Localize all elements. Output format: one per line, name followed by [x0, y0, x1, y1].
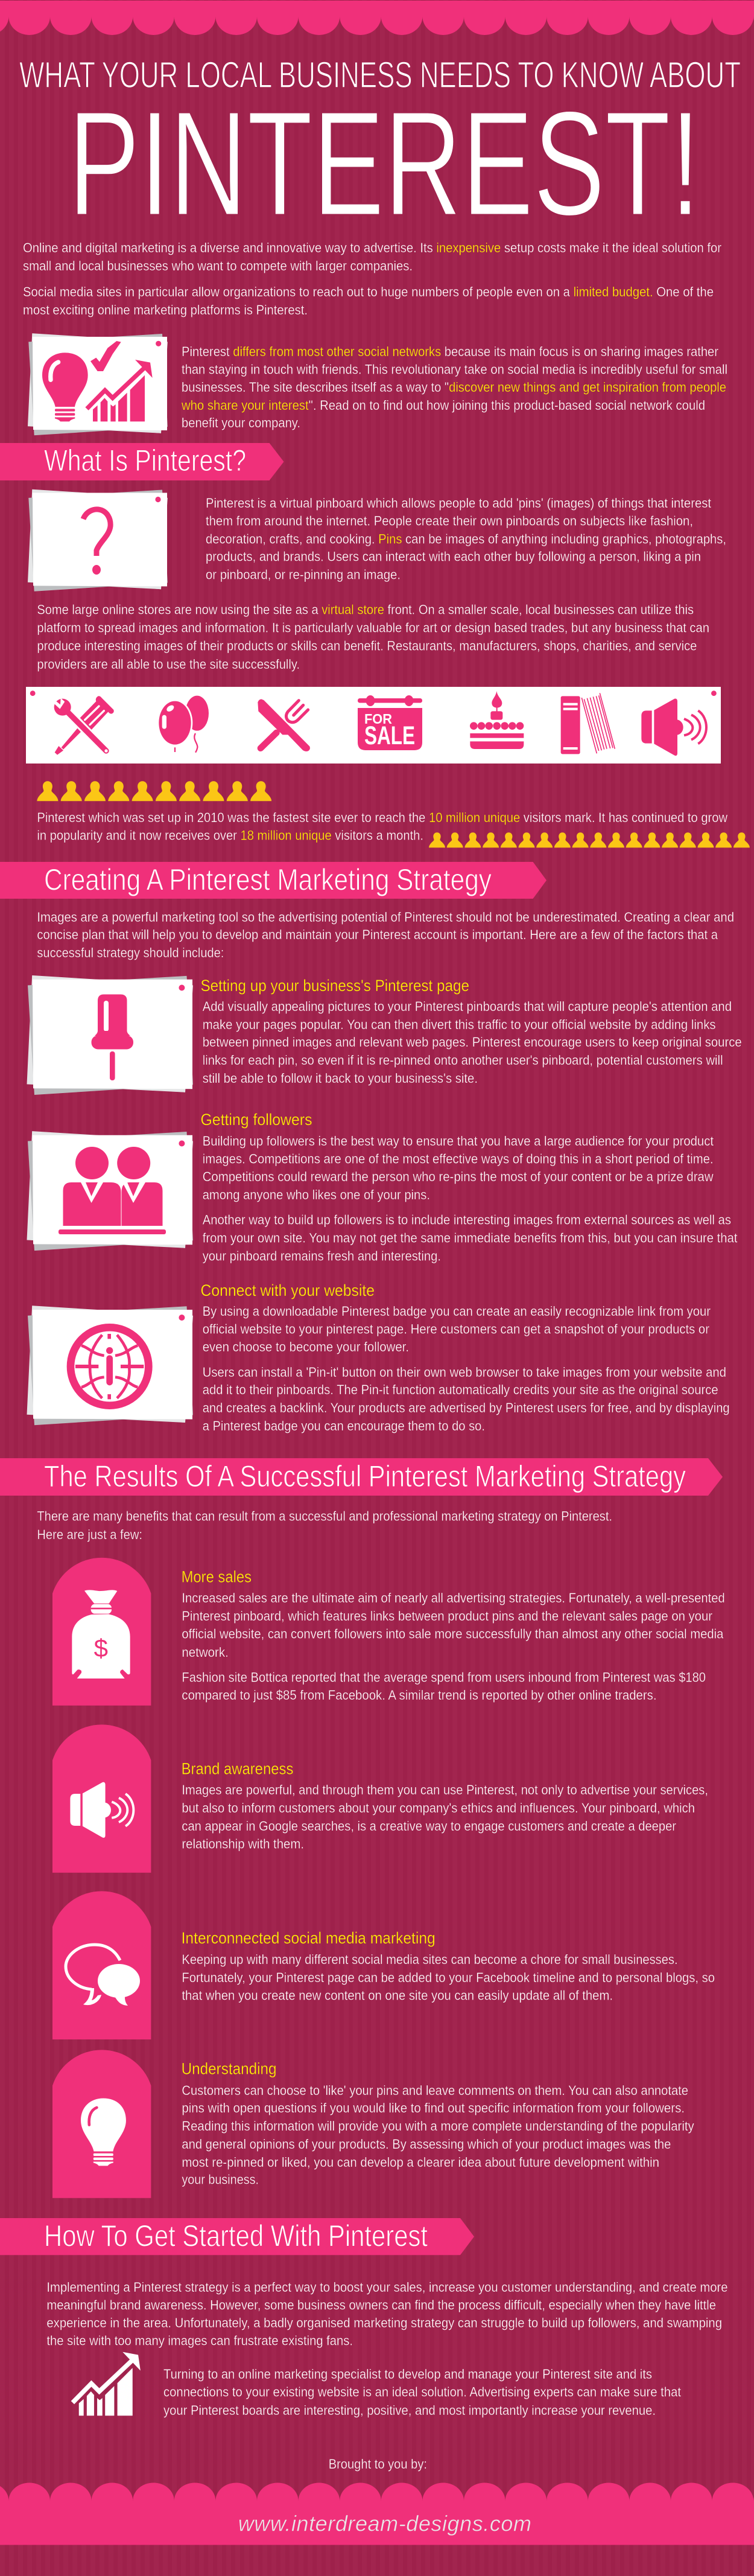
text: understanding: pins with open questions if you would like to find out specific information from your followers.: [182, 2100, 685, 2115]
panel: push pin note card: [27, 975, 193, 1095]
text: getting followers: [200, 1111, 737, 1263]
text: interconnected marketing: [182, 1929, 715, 2003]
text: how Pinterest differs: Pinterest differs from most other social networks because its main focus is on sharing images rather: [182, 344, 718, 359]
footer website address: www.interdream-designs.com: [238, 2511, 531, 2536]
text: connect with your website: official website to your pinterest page. Here customers can get a snapshot of your products or: [203, 1322, 709, 1337]
icon: books: [561, 693, 615, 754]
text: getting started: [46, 2280, 727, 2348]
panel: money bag arch: $: [94, 1634, 108, 1662]
text: interconnected marketing: that when you create new content on one site you can easily update all of them.: [182, 1988, 613, 2003]
panel: question mark note card: [28, 489, 168, 591]
intro text: small and local businesses who want to compete with larger companies.: [23, 258, 413, 273]
text: understanding: [182, 2059, 694, 2187]
text: interconnected marketing: Fortunately, your Pinterest page can be added to your Facebook timeline and to personal blogs, so: [182, 1970, 715, 1985]
text: connect with your website: even choose to become your follower.: [203, 1339, 409, 1354]
text: what is Pinterest: them from around the internet. People create their own pinboards on subjects like fashion,: [206, 513, 693, 529]
text: brought to you by: Brought to you by:: [329, 2456, 427, 2472]
text: how Pinterest differs: benefit your company.: [182, 415, 300, 430]
text: strategy intro: [37, 910, 734, 960]
intro text: Social media sites in particular allow organizations to reach out to huge numbers of people even on a limited budget. One of the: [23, 284, 714, 299]
panel: money bag arch: [52, 1558, 151, 1706]
icon: knife and fork: [258, 699, 310, 751]
text: interconnected marketing: Keeping up with many different social media sites can become a chore for small businesses.: [182, 1952, 678, 1967]
section banner: Creating A Pinterest Marketing Strategy: Creating A Pinterest Marketing Strategy: [44, 863, 492, 897]
text: results intro: Here are just a few:: [37, 1527, 142, 1542]
text: brand awareness: but also to inform customers about your company's ethics and influences. Your pinboard, which: [182, 1800, 695, 1816]
text: brand awareness: can appear in Google searches, is a creative way to engage customers and create a deeper: [182, 1819, 676, 1834]
text: virtual store front: providers are all able to use the site successfully.: [37, 657, 300, 672]
text: understanding: most re-pinned or liked, you can develop a clearer idea about future development within: [182, 2155, 659, 2170]
text: what is Pinterest: Pinterest is a virtual pinboard which allows people to add 'pins' (images) of things that interest: [206, 496, 711, 511]
panel: light bulb arch: [52, 2050, 151, 2198]
text: understanding: Understanding: [182, 2059, 276, 2077]
text: getting followers: images. Competitions are one of the most effective ways of doing this in a short period of time.: [203, 1152, 714, 1167]
text: getting started: the site with too many images can frustrate existing fans.: [46, 2333, 353, 2348]
text: marketing specialist: connections to your existing website is an ideal solution. Advertising experts can make sure that: [163, 2385, 681, 2400]
text: getting followers: among anyone who likes one of your pins.: [203, 1187, 430, 1202]
text: marketing specialist: your Pinterest boards are interesting, positive, and most importantly increase your revenue.: [163, 2403, 656, 2418]
text: visitor statistics: [37, 810, 727, 843]
icon: for sale sign: [358, 695, 422, 750]
text: setting up your page: Setting up your business's Pinterest page: [200, 977, 469, 995]
text: how Pinterest differs: [181, 344, 727, 430]
text: connect with your website: By using a downloadable Pinterest badge you can create an easily recognizable link from your: [203, 1304, 711, 1319]
text: brand awareness: Brand awareness: [182, 1760, 293, 1778]
text: results intro: There are many benefits that can result from a successful and professional marketing strategy on Pinterest.: [37, 1509, 612, 1523]
text: what is Pinterest: decoration, crafts, and cooking. Pins can be images of anything including graphics, photographs,: [206, 531, 726, 547]
icon: birthday cake: [470, 691, 524, 749]
icon: balloons: [159, 696, 209, 753]
text: interconnected marketing: Interconnected social media marketing: [182, 1929, 436, 1947]
text: brand awareness: [182, 1760, 708, 1852]
icon: growth chart: [72, 2352, 141, 2415]
text: visitor statistics: in popularity and it now receives over 18 million unique visitors a month.: [37, 828, 423, 843]
text: understanding: Reading this information will provide you with a more complete understanding of the popularity: [182, 2119, 694, 2134]
icon: speaker: [641, 698, 706, 756]
text: getting followers: Building up followers is the best way to ensure that you have a large audience for your product: [203, 1133, 714, 1149]
panel: speaker arch: [52, 1724, 151, 1873]
icon: for sale sign: FOR: [364, 711, 392, 727]
text: virtual store front: [37, 602, 709, 672]
top scalloped border: [0, 1, 754, 35]
text: more sales: Pinterest pinboard, which features links between product pins and the relevant sales page on your: [182, 1608, 712, 1624]
icon: for sale sign: SALE: [364, 721, 415, 750]
section banner: How To Get Started With Pinterest: How To Get Started With Pinterest: [44, 2219, 428, 2252]
text: more sales: compared to just $85 from Facebook. A similar trend is reported by other online traders.: [182, 1688, 656, 1703]
icon row: ten million visitors: [37, 781, 271, 801]
icon: wrench and screwdriver: [54, 696, 114, 755]
text: more sales: [182, 1567, 725, 1703]
text: visitor statistics: Pinterest which was set up in 2010 was the fastest site ever to reach the 10 million unique visitors mark. It has continued to grow: [37, 810, 727, 825]
text: setting up your page: links for each pin, so even if it is re-pinned onto another user's pinboard, potential customers will: [203, 1053, 723, 1068]
text: connect with your website: a Pinterest badge you can encourage them to do so.: [203, 1418, 485, 1433]
intro text: Online and digital marketing is a diverse and innovative way to advertise. Its inexpensive setup costs make it the ideal solution for: [23, 240, 721, 255]
text: setting up your page: still be able to follow it back to your business's site.: [203, 1071, 478, 1086]
text: results intro: [37, 1509, 612, 1542]
text: understanding: Customers can choose to 'like' your pins and leave comments on them. You can also annotate: [182, 2083, 688, 2098]
text: getting followers: your pinboard remains fresh and interesting.: [203, 1248, 441, 1263]
text: more sales: network.: [182, 1645, 229, 1660]
text: more sales: More sales: [182, 1567, 252, 1586]
text: understanding: your business.: [182, 2172, 259, 2187]
text: marketing specialist: [163, 2367, 681, 2418]
panel: followers note card: [27, 1131, 193, 1251]
text: connect with your website: Connect with your website: [200, 1281, 375, 1299]
text: what is Pinterest: [206, 496, 726, 582]
text: virtual store front: Some large online stores are now using the site as a virtual store front. On a smaller scale, local businesses can utilize this: [37, 602, 694, 617]
text: getting started: meaningful brand awareness. However, some business owners can find the process difficult, especially when they have little: [46, 2298, 716, 2313]
text: how Pinterest differs: businesses. The site describes itself as a way to "discover new things and get inspiration from people: [182, 380, 726, 395]
text: what is Pinterest: products, and brands. Users can interact with each other buy following a person, liking a pin: [206, 549, 701, 564]
text: connect with your website: [200, 1281, 730, 1433]
text: connect with your website: Users can install a 'Pin-it' button on their own web browser to take images from your website and: [203, 1365, 726, 1380]
icon row: eighteen million visitors: [429, 832, 750, 847]
section banner: What Is Pinterest?: What Is Pinterest?: [44, 444, 246, 477]
footer scalloped band: [0, 2482, 754, 2545]
text: more sales: Fashion site Bottica reported that the average spend from users inbound from Pinterest was $180: [182, 1670, 706, 1685]
text: getting followers: Getting followers: [200, 1111, 312, 1129]
text: brand awareness: relationship with them.: [182, 1837, 304, 1852]
panel: trades icon strip: [26, 687, 721, 764]
panel: globe note card: [27, 1306, 193, 1425]
text: more sales: official website, can convert followers into sale more successfully than almost any other social media: [182, 1627, 724, 1642]
text: what is Pinterest: or pinboard, or re-pinning an image.: [206, 567, 401, 582]
text: strategy intro: successful strategy should include:: [37, 945, 224, 960]
text: virtual store front: produce interesting images of their products or skills can benefit. Restaurants, manufacturers, shops, charities, and service: [37, 639, 697, 653]
panel: speech bubbles arch: [52, 1891, 151, 2039]
text: virtual store front: platform to spread images and information. It is particularly valuable for art or design based trades, but any business that can: [37, 620, 709, 635]
text: setting up your page: [200, 977, 742, 1086]
intro text: [23, 240, 721, 317]
text: marketing specialist: Turning to an online marketing specialist to develop and manage your Pinterest site and its: [163, 2367, 652, 2382]
text: how Pinterest differs: who share your interest". Read on to find out how joining this product-based social network could: [181, 398, 705, 413]
text: connect with your website: add it to their pinboards. The Pin-it function automatically credits your site as the original source: [203, 1382, 718, 1397]
text: setting up your page: make your pages popular. You can then divert this traffic to your official website by adding links: [203, 1017, 716, 1032]
text: getting followers: Competitions could reward the person who re-pins the most of your content or be a prize draw: [203, 1169, 714, 1184]
panel: bulb, check and growth chart note card: [28, 333, 168, 435]
text: brand awareness: Images are powerful, and through them you can use Pinterest, not only to advertise your services,: [182, 1782, 708, 1797]
intro text: most exciting online marketing platforms is Pinterest.: [23, 302, 308, 317]
text: understanding: and general opinions of your products. By assessing which of your product images was the: [182, 2137, 671, 2152]
